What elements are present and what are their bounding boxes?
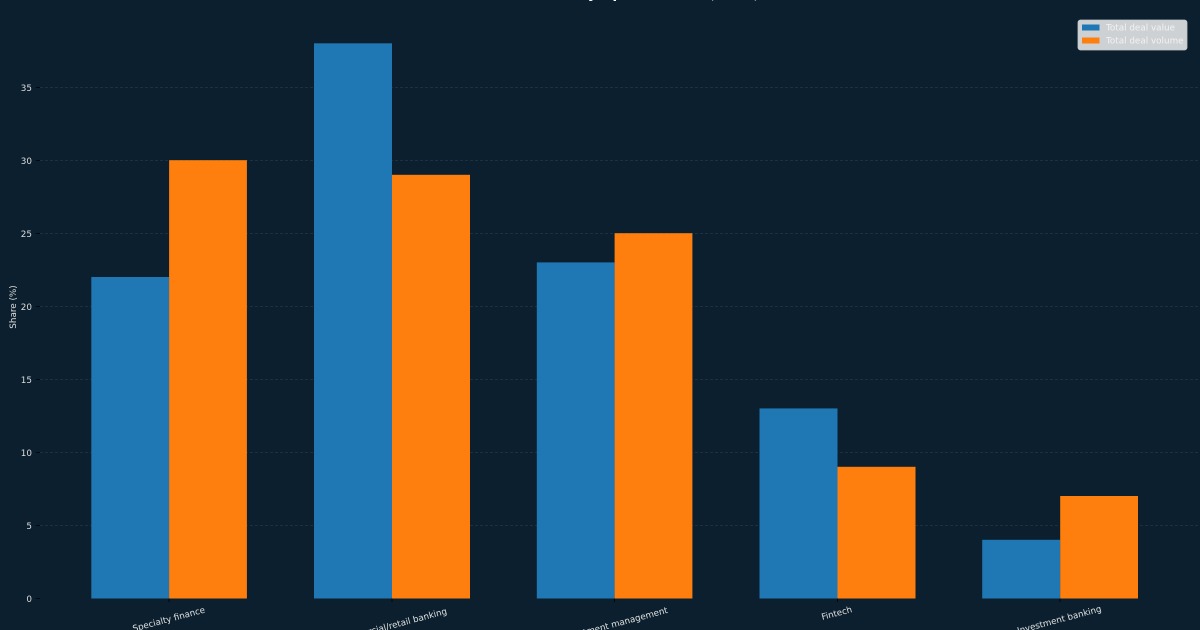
y axis tick labels: [21, 84, 32, 605]
x axis category labels: [132, 605, 1103, 630]
y axis tick labels: 10: [21, 449, 32, 459]
y axis tick labels: 0: [26, 595, 32, 605]
y axis tick labels: 25: [21, 230, 32, 240]
y axis tick labels: 30: [21, 157, 32, 167]
y axis tick labels: 5: [26, 522, 32, 532]
bars: total deal volume: [169, 160, 1138, 598]
legend swatch: total deal volume: [1082, 38, 1100, 44]
y axis title: Share (%): [9, 285, 19, 329]
bars: total deal value: [91, 43, 1060, 599]
y axis tick labels: 20: [21, 303, 32, 313]
legend: [1078, 20, 1187, 50]
y axis tick labels: 35: [21, 84, 32, 94]
legend label: total deal volume: Total deal volume: [1105, 36, 1184, 46]
y axis tick labels: 15: [21, 376, 32, 386]
x axis category labels: Fintech: [821, 605, 853, 623]
legend label: total deal value: Total deal value: [1105, 24, 1175, 34]
legend swatch: total deal value: [1082, 24, 1100, 30]
